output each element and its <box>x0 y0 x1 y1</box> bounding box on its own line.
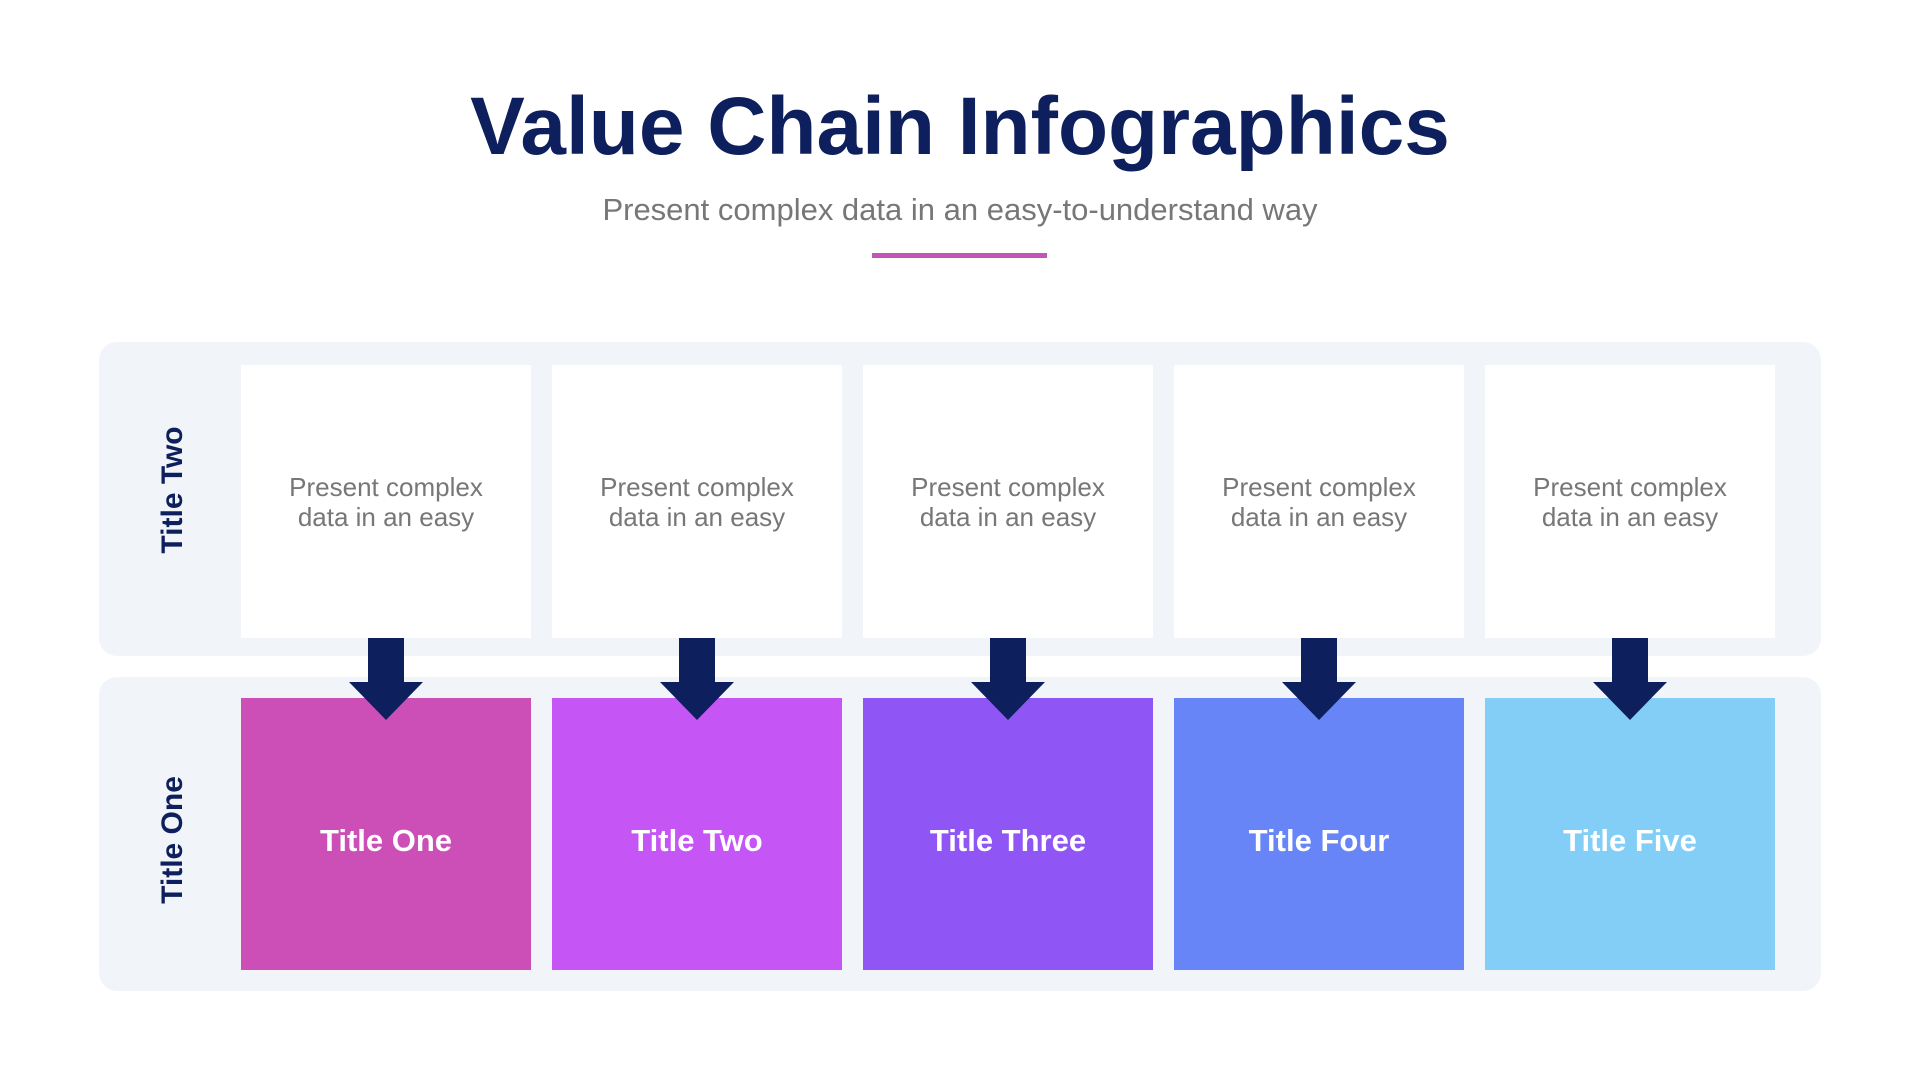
subtitle: Present complex data in an easy-to-understand way <box>602 192 1318 227</box>
text box 4: data in an easy <box>1231 502 1407 532</box>
colored box: Title Four <box>1174 698 1464 970</box>
text box 4: Present complex <box>1222 472 1416 502</box>
underline accent <box>872 253 1047 258</box>
title: Value Chain Infographics <box>470 81 1450 172</box>
text box 2: data in an easy <box>609 502 785 532</box>
arrow 2 <box>660 638 734 720</box>
text box 1: data in an easy <box>298 502 474 532</box>
colored box: Title Three <box>863 698 1153 970</box>
text box 1: Present complex <box>289 472 483 502</box>
arrow 1 <box>349 638 423 720</box>
arrow 5 <box>1593 638 1667 720</box>
text box 3 <box>863 365 1153 638</box>
vertical label: Title Two: Title Two <box>156 426 189 554</box>
vertical label: Title One: Title One <box>156 776 189 904</box>
text box 5: Present complex <box>1533 472 1727 502</box>
text box 2: Present complex <box>600 472 794 502</box>
colored box: Title Two <box>552 698 842 970</box>
panel: top row <box>99 342 1821 656</box>
text box 5: data in an easy <box>1542 502 1718 532</box>
colored box: Title Five: Title Five <box>1563 823 1697 858</box>
text box 3: data in an easy <box>920 502 1096 532</box>
colored box: Title Three: Title Three <box>930 823 1086 858</box>
text box 1 <box>241 365 531 638</box>
text box 5 <box>1485 365 1775 638</box>
colored box: Title Two: Title Two <box>631 823 763 858</box>
colored box: Title One <box>241 698 531 970</box>
colored box: Title Five <box>1485 698 1775 970</box>
panel: bottom row <box>99 677 1821 991</box>
text box 3: Present complex <box>911 472 1105 502</box>
colored box: Title Four: Title Four <box>1249 823 1389 858</box>
arrow 4 <box>1282 638 1356 720</box>
colored box: Title One: Title One <box>320 823 452 858</box>
text box 2 <box>552 365 842 638</box>
arrow 3 <box>971 638 1045 720</box>
text box 4 <box>1174 365 1464 638</box>
